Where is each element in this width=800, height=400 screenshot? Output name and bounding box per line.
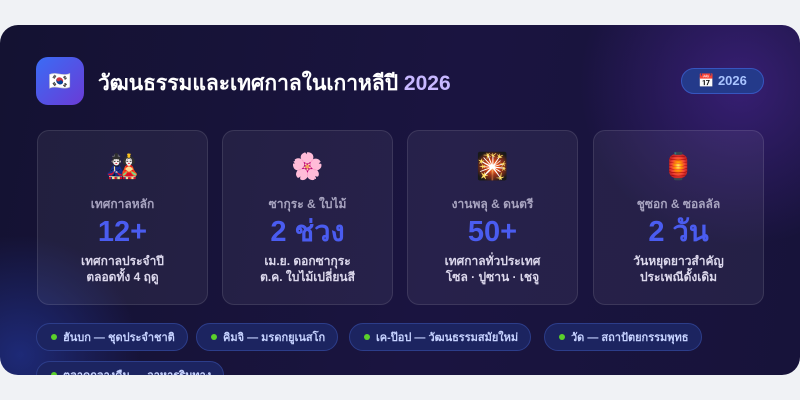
pill: hanbok: ฮันบก — ชุดประจำชาติ (63, 332, 175, 344)
pill: hanbok (36, 323, 188, 351)
icon: flag logo (36, 57, 84, 105)
title: วัฒนธรรมและเทศกาลในเกาหลีปี 2026 (98, 72, 451, 95)
card: festivals: เทศกาลหลัก (91, 197, 154, 211)
pill: temple: วัด — สถาปัตยกรรมพุทธ (571, 332, 688, 344)
card: fireworks: งานพลุ & ดนตรี (452, 197, 533, 211)
card: festivals: 🎎 (106, 151, 139, 181)
card: fireworks: 50+ (468, 216, 517, 248)
card: holidays (593, 130, 764, 305)
card: holidays: 🏮 (662, 151, 695, 181)
pill: kpop (349, 323, 531, 351)
card: sakura: 2 ช่วง (270, 216, 345, 248)
card: fireworks: โซล · ปูซาน · เชจู (446, 270, 539, 284)
card: festivals: 12+ (98, 216, 147, 248)
pill: kimchi: คิมจิ — มรดกยูเนสโก (223, 332, 325, 344)
card: festivals (37, 130, 208, 305)
card: sakura: เม.ย. ดอกซากุระ (264, 254, 351, 268)
icon: flag logo: 🇰🇷 (49, 70, 71, 90)
pill: temple (544, 323, 702, 351)
card: fireworks: เทศกาลทั่วประเทศ (445, 254, 540, 268)
card: holidays: ชูซอก & ซอลลัล (637, 197, 720, 211)
card: sakura: ซากุระ & ใบไม้ (269, 197, 346, 211)
card: sakura (222, 130, 393, 305)
card: fireworks (407, 130, 578, 305)
card: fireworks: 🎇 (476, 151, 509, 181)
card: sakura: ต.ค. ใบไม้เปลี่ยนสี (260, 270, 355, 284)
card: holidays: วันหยุดยาวสำคัญ (633, 254, 724, 268)
badge: year (681, 68, 764, 94)
pill: night market (36, 361, 224, 389)
card: holidays: 2 วัน (648, 216, 709, 248)
pill: kpop: เค-ป๊อป — วัฒนธรรมสมัยใหม่ (376, 332, 518, 344)
badge: year: 📅 2026 (698, 73, 747, 88)
card: holidays: ประเพณีดั้งเดิม (640, 270, 717, 284)
card: festivals: เทศกาลประจำปี (81, 254, 164, 268)
card: sakura: 🌸 (291, 151, 324, 181)
pill: kimchi (196, 323, 338, 351)
card: festivals: ตลอดทั้ง 4 ฤดู (86, 270, 159, 284)
